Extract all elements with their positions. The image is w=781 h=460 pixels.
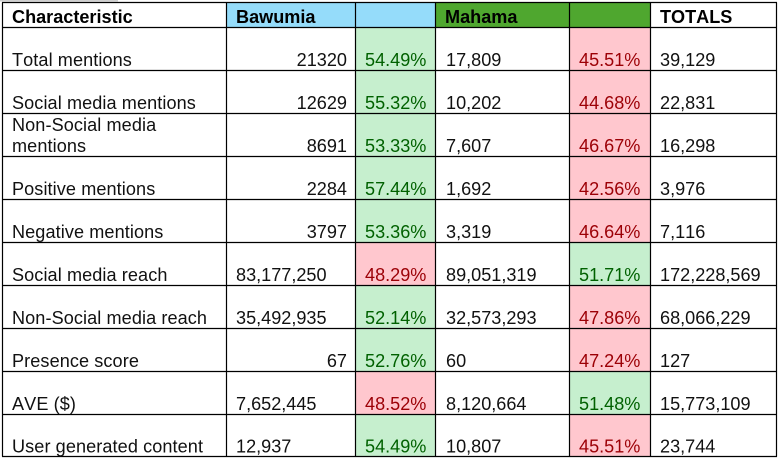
row: non-social media reach: 35,492,935 [236, 308, 327, 328]
header row: Mahama [445, 7, 518, 27]
row: user generated content: 54.49% [365, 436, 426, 456]
row: non-social media mentions: 16,298 [660, 136, 715, 156]
row: AVE: 15,773,109 [660, 394, 751, 414]
row: positive mentions: 3,976 [660, 179, 705, 199]
row: user generated content [12, 436, 715, 456]
row: user generated content: 45.51% [579, 436, 640, 456]
row: presence score: 47.24% [579, 351, 640, 371]
header row: Characteristic [12, 7, 133, 27]
row: negative mentions [12, 222, 705, 242]
row: total mentions: Total mentions [12, 50, 132, 70]
row: negative mentions: Negative mentions [12, 222, 163, 242]
row: social media reach: 48.29% [365, 265, 426, 285]
row: total mentions: 54.49% [365, 50, 426, 70]
row: AVE: 51.48% [579, 394, 640, 414]
row: AVE [12, 394, 751, 414]
row: user generated content: 12,937 [236, 436, 291, 456]
header row: TOTALS [660, 7, 732, 27]
row: social media reach: 51.71% [579, 265, 640, 285]
row: presence score: 67 [327, 351, 347, 371]
row: AVE: 8,120,664 [446, 394, 526, 414]
row: non-social media mentions: 46.67% [579, 136, 640, 156]
row: social media reach: 172,228,569 [660, 265, 761, 285]
row: positive mentions: 2284 [307, 179, 347, 199]
row: positive mentions: Positive mentions [12, 179, 155, 199]
row: presence score [12, 351, 690, 371]
row: social media reach: 89,051,319 [446, 265, 537, 285]
row: presence score: 60 [446, 351, 466, 371]
row: total mentions: 17,809 [446, 50, 501, 70]
row: social media mentions: 10,202 [446, 93, 501, 113]
row: social media reach: Social media reach [12, 265, 168, 285]
row: non-social media mentions: Non-Social media [12, 115, 157, 135]
row: user generated content: 23,744 [660, 436, 715, 456]
row: negative mentions: 7,116 [660, 222, 705, 242]
row: AVE: 48.52% [365, 394, 426, 414]
row: non-social media reach: Non-Social media reach [12, 308, 207, 328]
row: negative mentions: 3797 [307, 222, 347, 242]
row: AVE: AVE ($) [12, 394, 76, 414]
row: non-social media mentions: mentions [12, 136, 86, 156]
row: positive mentions: 42.56% [579, 179, 640, 199]
row: total mentions: 39,129 [660, 50, 715, 70]
row: positive mentions [12, 179, 705, 199]
row: total mentions: 45.51% [579, 50, 640, 70]
row: social media mentions: 55.32% [365, 93, 426, 113]
row: presence score: 127 [660, 351, 690, 371]
row: social media reach: 83,177,250 [236, 265, 327, 285]
row: social media mentions: Social media mentions [12, 93, 196, 113]
row: AVE: 7,652,445 [236, 394, 316, 414]
row: social media mentions: 12629 [297, 93, 347, 113]
header row [12, 3, 732, 27]
row: non-social media mentions: 53.33% [365, 136, 426, 156]
row: positive mentions: 57.44% [365, 179, 426, 199]
row: negative mentions: 3,319 [446, 222, 491, 242]
row: user generated content: User generated content [12, 436, 203, 456]
row: non-social media mentions [12, 115, 715, 156]
row: non-social media reach: 32,573,293 [446, 308, 537, 328]
row: social media mentions: 22,831 [660, 93, 715, 113]
row: non-social media reach [12, 308, 751, 328]
row: non-social media mentions: 8691 [307, 136, 347, 156]
row: presence score: 52.76% [365, 351, 426, 371]
header row: Bawumia [236, 7, 316, 27]
row: total mentions: 21320 [297, 50, 347, 70]
row: social media mentions [12, 93, 715, 113]
row: total mentions [12, 50, 715, 70]
row: non-social media reach: 52.14% [365, 308, 426, 328]
row: social media mentions: 44.68% [579, 93, 640, 113]
row: non-social media reach: 68,066,229 [660, 308, 751, 328]
row: negative mentions: 53.36% [365, 222, 426, 242]
row: positive mentions: 1,692 [446, 179, 491, 199]
row: social media reach [12, 265, 761, 285]
cell shading [355, 27, 650, 456]
row: non-social media reach: 47.86% [579, 308, 640, 328]
row: negative mentions: 46.64% [579, 222, 640, 242]
row: user generated content: 10,807 [446, 436, 501, 456]
row: presence score: Presence score [12, 351, 139, 371]
row: non-social media mentions: 7,607 [446, 136, 491, 156]
